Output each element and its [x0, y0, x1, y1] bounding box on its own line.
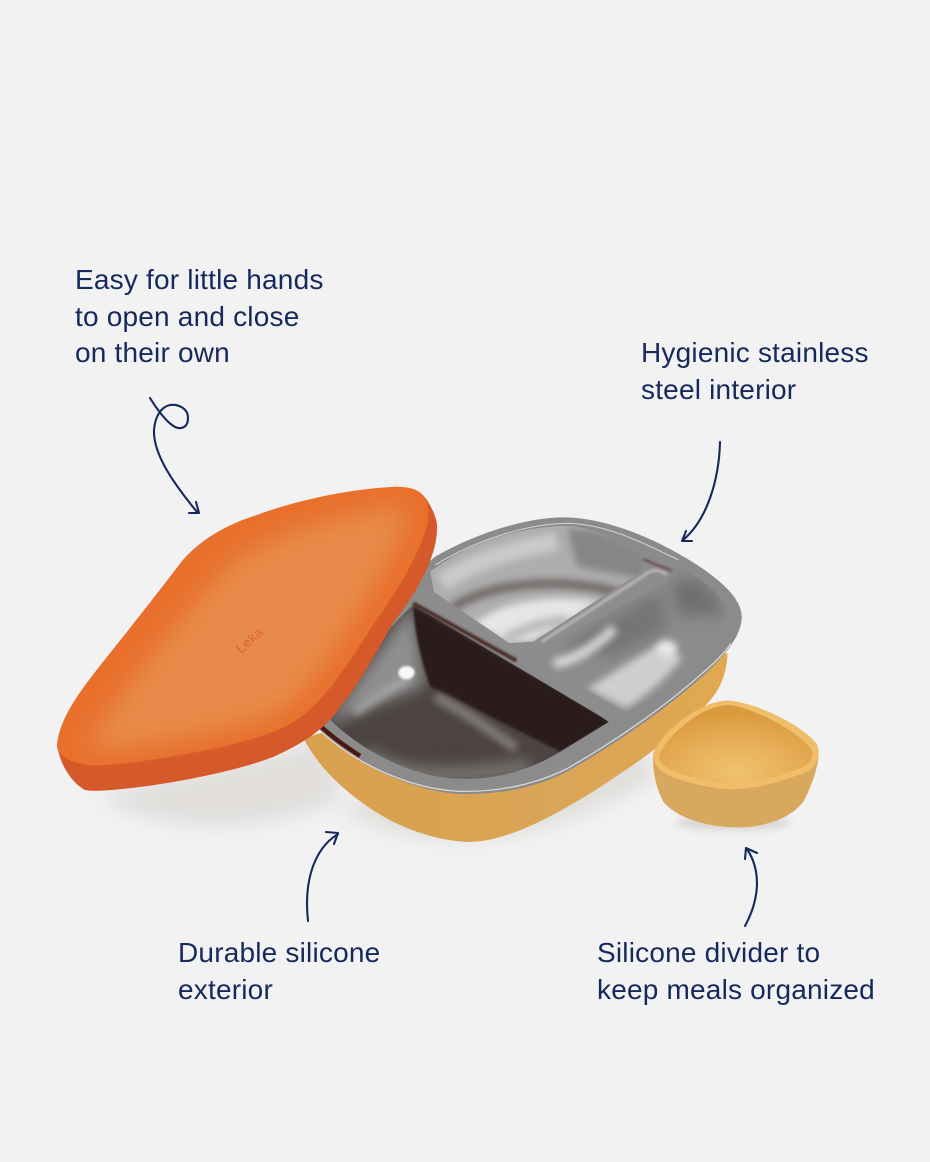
tray body: silicone exterior [303, 653, 728, 842]
callout text: silicone exterior: Durable silicone [178, 937, 380, 968]
lid [57, 487, 437, 791]
callout text: stainless steel: steel interior [641, 374, 796, 404]
callout text: silicone divider: keep meals organized [597, 974, 875, 1004]
callout text: silicone divider [597, 937, 875, 1005]
lid side [57, 487, 437, 791]
compartment: upper well [430, 526, 634, 644]
callout text: easy to open: to open and close [75, 300, 299, 332]
callout text: easy to open: Easy for little hands [75, 264, 324, 295]
cup inside [659, 705, 813, 783]
callout text: stainless steel: Hygienic stainless [641, 337, 869, 368]
callout text: silicone exterior [178, 937, 380, 1004]
dark reflection on the rim [321, 727, 360, 756]
callout text: silicone exterior: exterior [178, 974, 273, 1004]
compartment: large dark well [330, 605, 609, 779]
callout text: silicone divider: Silicone divider to [597, 937, 820, 968]
small cup [653, 701, 818, 827]
cup outer [653, 701, 818, 827]
cup lip [653, 701, 818, 789]
product illustration [56, 486, 818, 842]
lid dish shading [85, 505, 406, 750]
callout text: easy to open: on their own [75, 337, 230, 368]
shadows [95, 740, 791, 839]
callout text: easy to open [75, 264, 324, 368]
compartment: right well [550, 576, 724, 712]
tray [303, 517, 742, 842]
lid top surface [57, 487, 428, 765]
tray rim [310, 517, 742, 794]
callout text: stainless steel [641, 337, 869, 404]
logo mark: Leka [233, 624, 266, 656]
divider ridge [412, 559, 672, 722]
